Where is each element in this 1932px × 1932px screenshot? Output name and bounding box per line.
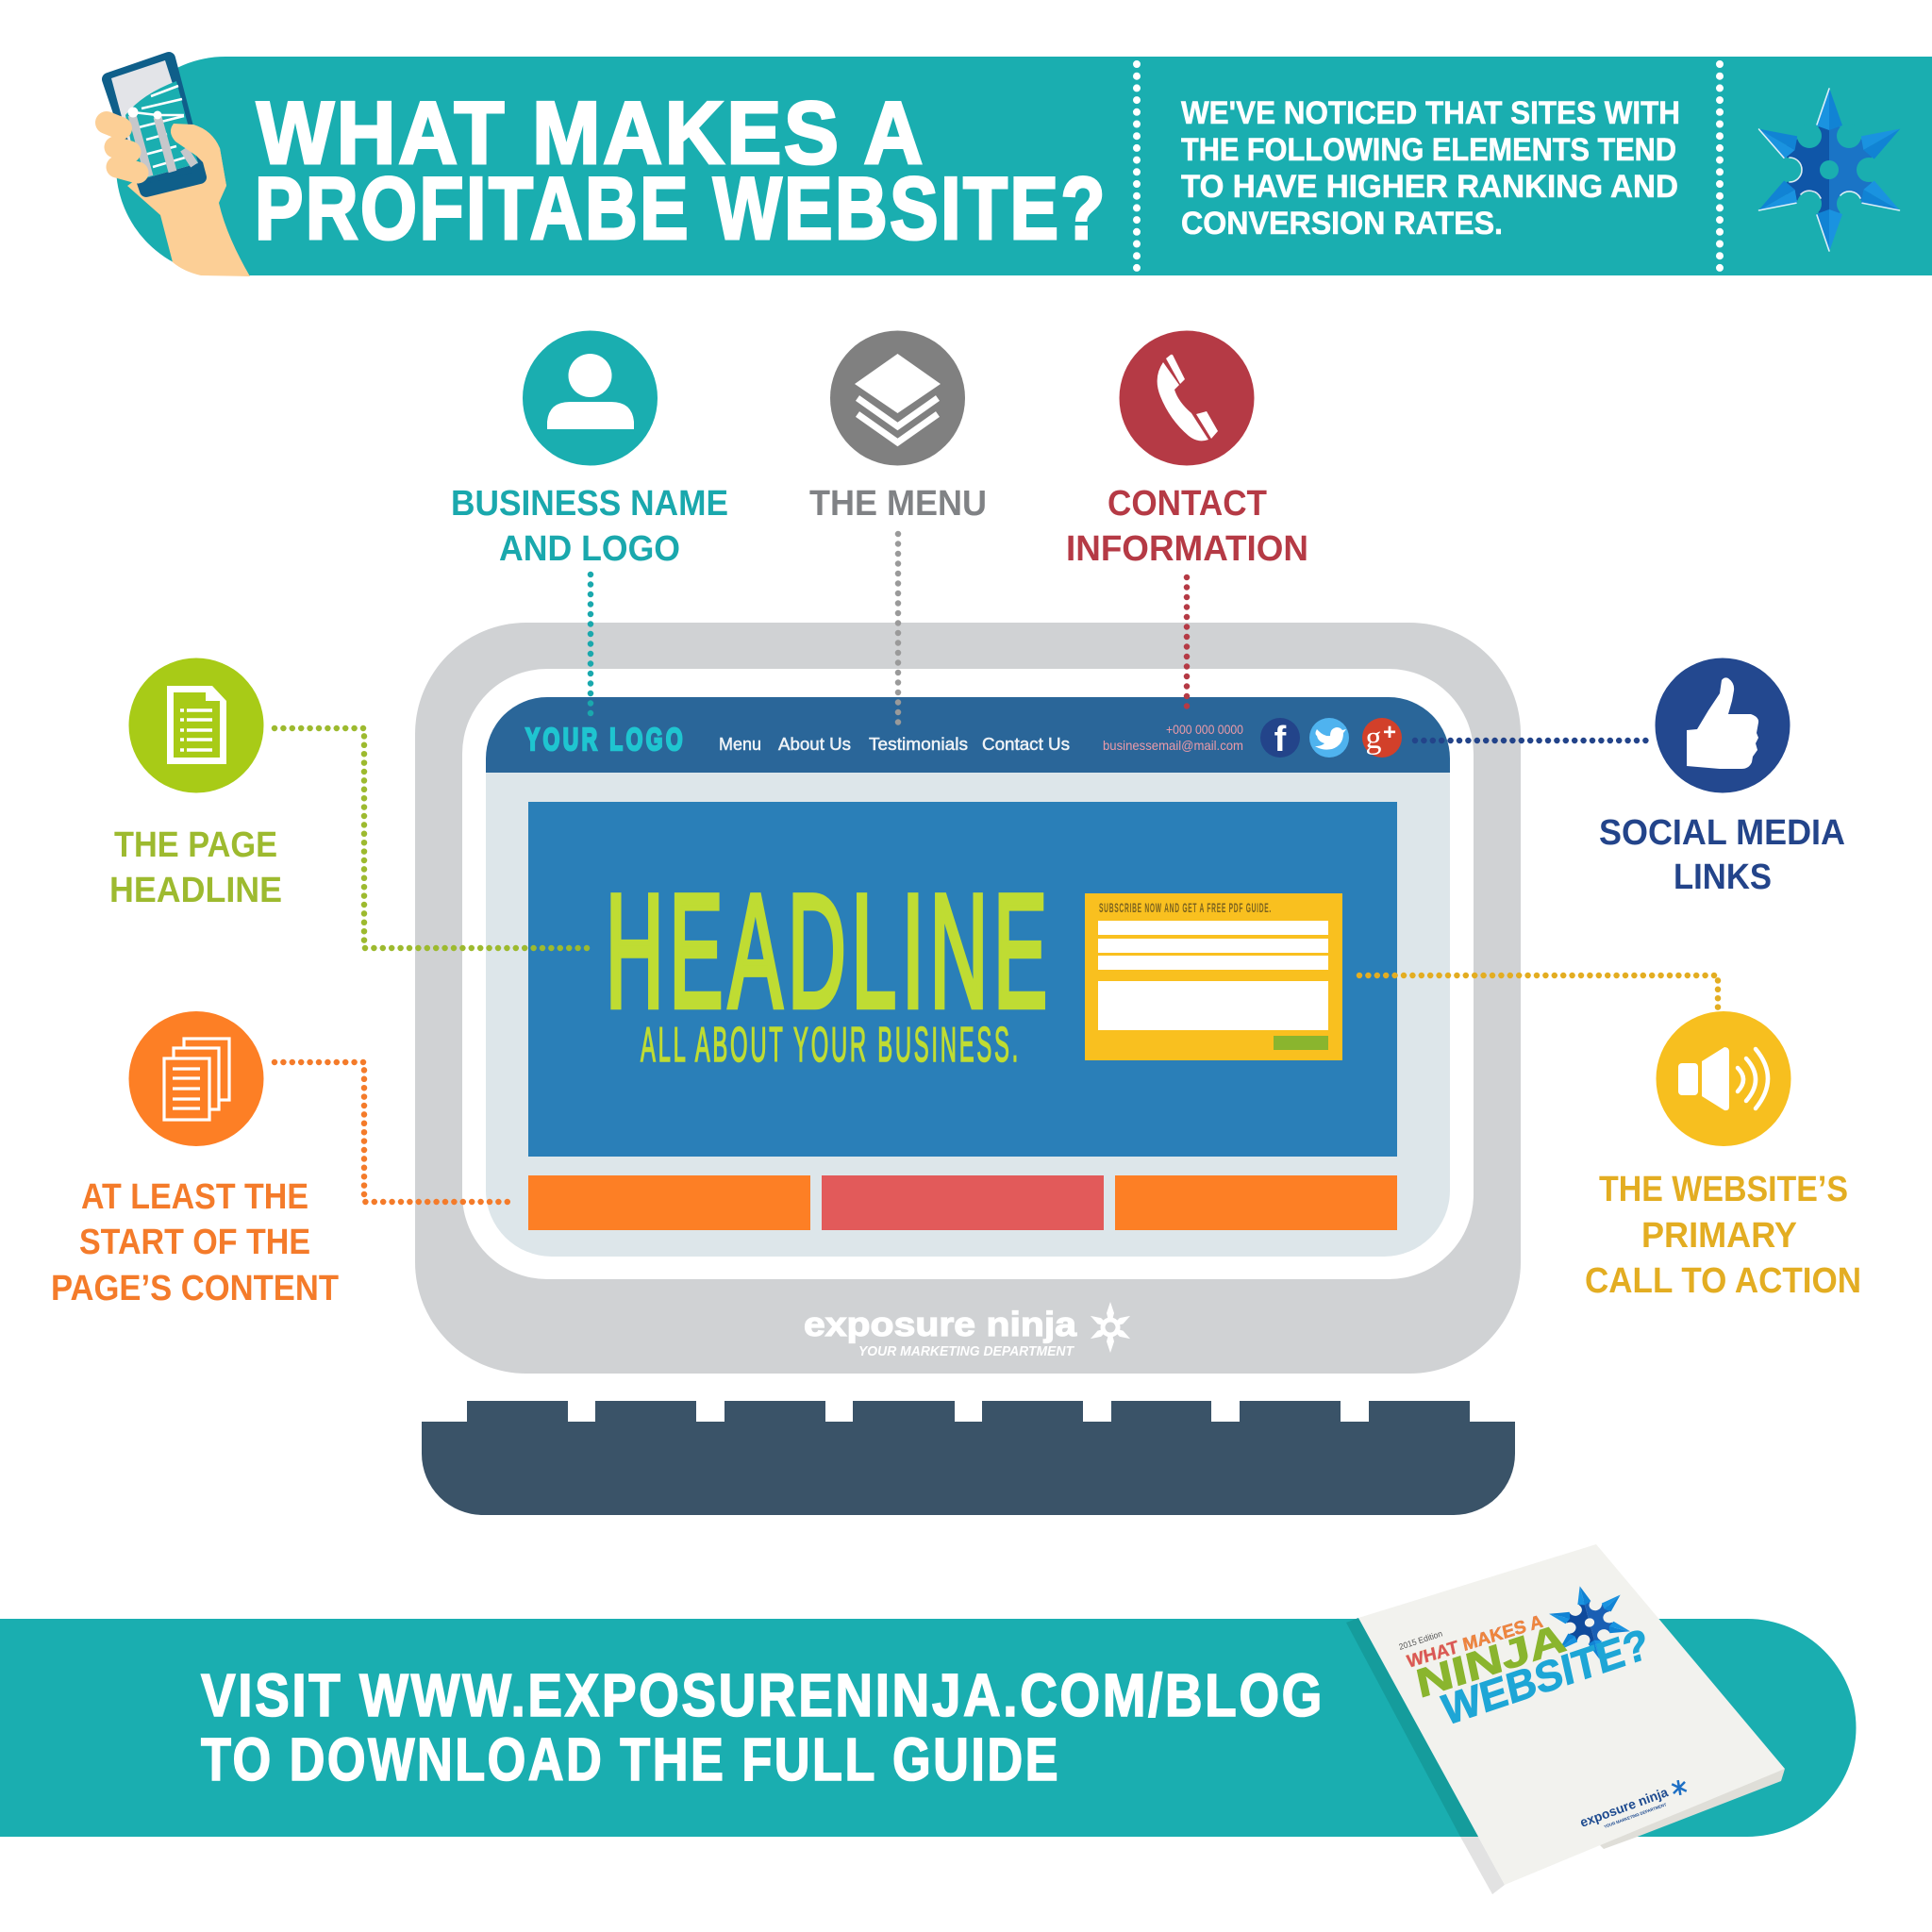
brochure: [1346, 1544, 1785, 1894]
callout: primary call to action: THE WEBSITE’S: [1599, 1170, 1848, 1209]
callout: the menu: [809, 330, 987, 724]
hero panel: ALL ABOUT YOUR BUSINESS.: [641, 1018, 1021, 1073]
nav links: [719, 735, 1070, 754]
contact details: businessemail@mail.com: [1103, 738, 1243, 753]
nav links: Contact Us: [982, 735, 1070, 754]
intro text: TO HAVE HIGHER RANKING AND: [1181, 169, 1678, 205]
panel: footer band: [0, 1619, 1857, 1837]
callout: social media links: SOCIAL MEDIA: [1599, 813, 1845, 853]
hero panel: HEADLINE: [606, 861, 1053, 1041]
callout: page content: [51, 1011, 515, 1308]
subscribe form: [1085, 893, 1342, 1060]
callout: page content: PAGE’S CONTENT: [51, 1269, 339, 1308]
social icons: f: [1274, 720, 1287, 759]
nav links: Testimonials: [869, 735, 968, 754]
contact details: [1103, 722, 1243, 753]
social icons: [1260, 718, 1402, 759]
callout: contact information: CONTACT: [1108, 484, 1267, 524]
callout: primary call to action: [1359, 975, 1861, 1301]
title: [255, 83, 1108, 258]
panel: header band: [107, 57, 1932, 276]
callout: page content: AT LEAST THE: [81, 1177, 308, 1217]
callout: business name and logo: AND LOGO: [499, 529, 680, 569]
social icons: +: [1383, 720, 1396, 745]
intro text: THE FOLLOWING ELEMENTS TEND: [1181, 132, 1676, 168]
brochure title: WHAT MAKES A: [1406, 1611, 1545, 1673]
brochure logo: exposure ninja: [1578, 1784, 1670, 1830]
icon: shuriken: [1752, 88, 1907, 252]
brand logo on monitor: exposure ninja: [804, 1305, 1077, 1343]
panel: monitor: [415, 623, 1521, 1374]
nav links: Menu: [719, 735, 761, 754]
brand logo on monitor: [804, 1302, 1132, 1359]
contact details: +000 000 0000: [1166, 722, 1243, 737]
monitor base keyboard: [422, 1401, 1515, 1515]
footer call to action text: VISIT WWW.EXPOSURENINJA.COM/BLOG: [201, 1661, 1324, 1729]
hero panel: [528, 802, 1397, 1157]
callout: the page headline: THE PAGE: [114, 825, 277, 865]
callout: the page headline: [109, 658, 594, 948]
brochure title: 2015 Edition: [1398, 1629, 1443, 1652]
social icons: g: [1366, 721, 1381, 756]
callout: business name and logo: BUSINESS NAME: [451, 484, 728, 524]
brochure title: NINJA: [1412, 1615, 1570, 1707]
title: PROFITABE WEBSITE?: [255, 158, 1108, 258]
callout: contact information: INFORMATION: [1066, 529, 1308, 569]
brochure logo: YOUR MARKETING DEPARTMENT: [1604, 1802, 1667, 1829]
callout: primary call to action: CALL TO ACTION: [1585, 1261, 1861, 1301]
subscribe form: SUBSCRIBE NOW AND GET A FREE PDF GUIDE.: [1099, 900, 1272, 915]
callout: the menu: THE MENU: [809, 484, 987, 524]
callout: contact information: [1066, 330, 1308, 709]
title: WHAT MAKES A: [257, 83, 925, 182]
callout: business name and logo: [451, 330, 728, 715]
nav links: About Us: [778, 735, 851, 754]
icon: hand holding phone: [107, 58, 250, 276]
logo placeholder: YOUR LOGO: [525, 722, 686, 757]
brochure title: WEBSITE?: [1438, 1619, 1653, 1735]
callout: social media links: [1415, 658, 1845, 897]
intro text: CONVERSION RATES.: [1181, 206, 1503, 242]
callout: page content: START OF THE: [79, 1223, 310, 1262]
callout: social media links: LINKS: [1674, 858, 1772, 897]
intro text: [1181, 95, 1680, 242]
footer call to action text: TO DOWNLOAD THE FULL GUIDE: [201, 1725, 1060, 1793]
brand logo on monitor: YOUR MARKETING DEPARTMENT: [858, 1343, 1075, 1359]
callout: the page headline: HEADLINE: [109, 871, 282, 910]
footer call to action text: [201, 1661, 1324, 1793]
website nav bar: [486, 697, 1450, 773]
brochure shuriken: [1541, 1575, 1639, 1670]
callout: primary call to action: PRIMARY: [1641, 1216, 1797, 1256]
intro text: WE'VE NOTICED THAT SITES WITH: [1181, 95, 1680, 131]
content blocks: [528, 1175, 1397, 1230]
